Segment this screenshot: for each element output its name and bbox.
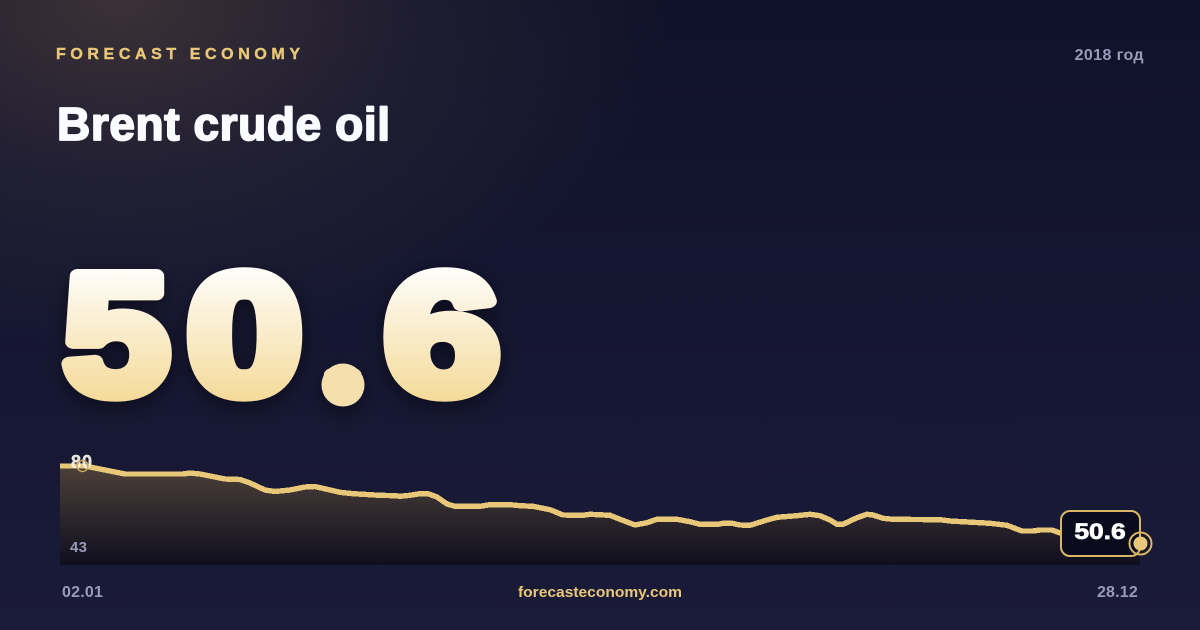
current value callout: 50.6 (1074, 520, 1126, 544)
big value: 5 (63, 240, 169, 430)
title: Brent crude oil (57, 98, 391, 150)
big value (63, 240, 500, 430)
end marker (1130, 532, 1152, 554)
price line (60, 466, 1100, 538)
axis max label: 80 (71, 452, 93, 472)
big value: . (322, 285, 363, 419)
start marker (77, 460, 88, 472)
chart area fill (60, 466, 1140, 565)
big value: 0 (187, 240, 302, 430)
start date: 02.01 (62, 584, 103, 601)
end date: 28.12 (1097, 584, 1138, 601)
axis min label: 43 (70, 539, 87, 556)
current value callout (1061, 511, 1152, 556)
site url: forecasteconomy.com (518, 584, 682, 601)
year label: 2018 год (1075, 47, 1144, 64)
brand label: FORECAST ECONOMY (56, 46, 300, 63)
area chart (60, 466, 1140, 565)
big value: 6 (384, 240, 500, 430)
